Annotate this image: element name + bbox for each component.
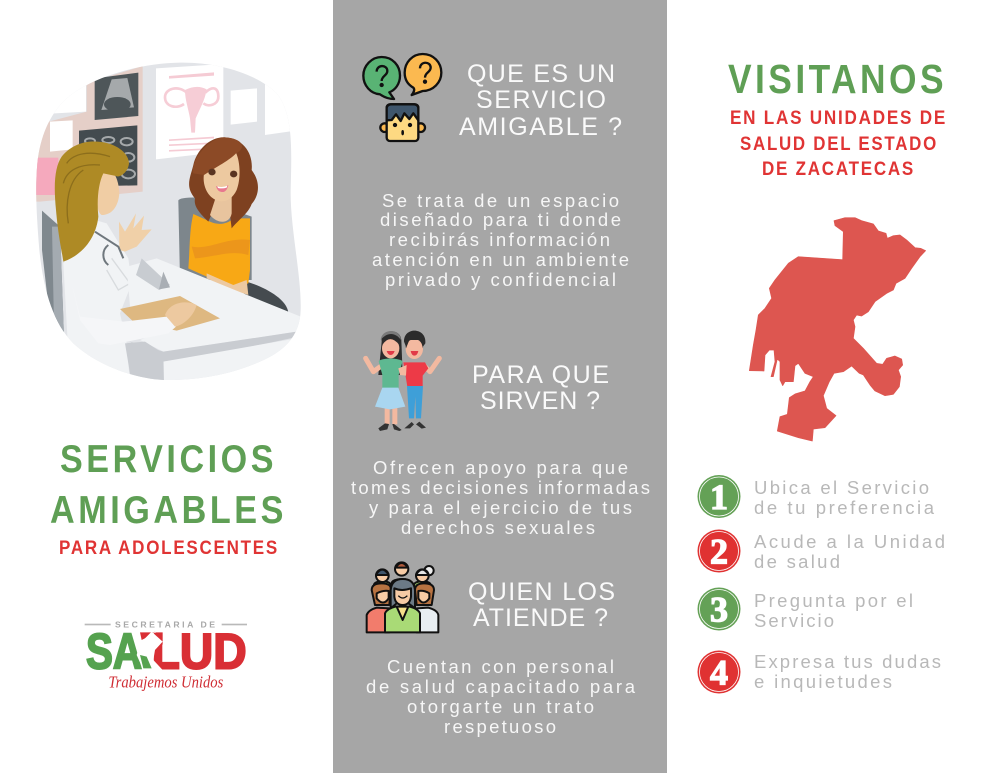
pink sheet [36, 158, 58, 195]
patient sweater [188, 214, 250, 288]
icon: two adolescents [366, 331, 439, 431]
text block: quien los atiende: de salud capacitado para [366, 676, 636, 697]
desk sign [136, 258, 170, 290]
patient hair back [189, 137, 258, 228]
text block: para que sirven: derechos sexuales [401, 517, 595, 538]
text block: definicion: privado y confidencial [385, 269, 616, 290]
step 3: Pregunta por el [754, 590, 913, 611]
illustration: consultation [36, 62, 301, 380]
text block: quien los atiende: respetuoso [444, 716, 556, 737]
step 3 [698, 588, 913, 631]
step 3: 3 [710, 590, 728, 630]
heading: quien los atiende: QUIEN LOS [468, 578, 615, 606]
step 2 [698, 530, 945, 572]
heading: visitanos: VISITANOS [728, 56, 947, 102]
heading: para que sirven: PARA QUE [472, 361, 609, 389]
scan poster [79, 125, 137, 187]
step 4 [698, 650, 941, 694]
heading: servicios amigables: SERVICIOS [60, 438, 277, 481]
text block: para que sirven: Ofrecen apoyo para que [373, 457, 628, 478]
logo: secretaria de salud: SECRETARIA DE [115, 620, 215, 630]
text block: quien los atiende [366, 656, 636, 737]
subheading: unidades de salud: SALUD DEL ESTADO [740, 133, 938, 155]
patient eyes and mouth [208, 169, 216, 175]
heading: para que sirven: SIRVEN ? [480, 387, 600, 415]
subheading: unidades de salud: EN LAS UNIDADES DE [730, 107, 947, 129]
folder [120, 296, 220, 331]
text block: definicion: atención en un ambiente [372, 249, 629, 270]
heading: que es un servicio amigable: SERVICIO [476, 86, 606, 114]
panel: centre column [333, 0, 667, 773]
heading: quien los atiende [468, 578, 615, 632]
logo: secretaria de salud: Trabajemos Unidos [108, 672, 223, 691]
desk [127, 258, 301, 352]
icon: health team [367, 562, 438, 632]
step 4: 4 [710, 652, 728, 692]
logo: secretaria de salud: LUD [152, 624, 247, 680]
patient chair [178, 197, 252, 280]
subheading: unidades de salud: DE ZACATECAS [762, 158, 915, 180]
text block: para que sirven: tomes decisiones informadas [351, 477, 650, 498]
icon: question bubbles and head [363, 54, 441, 141]
text block: quien los atiende: otorgarte un trato [407, 696, 594, 717]
step 4: Expresa tus dudas [754, 651, 941, 672]
step 1 [698, 475, 935, 518]
patient arms [207, 273, 248, 295]
step 4: e inquietudes [754, 671, 892, 692]
heading: servicios amigables: AMIGABLES [50, 489, 287, 532]
text block: definicion: Se trata de un espacio [382, 190, 619, 211]
doctor hair [55, 141, 129, 262]
doctor chair [42, 211, 64, 337]
heading: que es un servicio amigable [459, 60, 622, 141]
doctor hand [119, 213, 152, 252]
beige board [30, 66, 143, 202]
text block: para que sirven [351, 457, 650, 538]
logo: secretaria de salud [85, 620, 247, 691]
text block: quien los atiende: Cuentan con personal [387, 656, 614, 677]
step 1: Ubica el Servicio [754, 477, 929, 498]
doctor face [98, 173, 120, 215]
heading: quien los atiende: ATIENDE ? [473, 604, 608, 632]
heading: servicios amigables [50, 438, 287, 532]
heading: que es un servicio amigable: AMIGABLE ? [459, 113, 622, 141]
text block: definicion [372, 190, 629, 290]
heading: que es un servicio amigable: QUE ES UN [467, 60, 615, 88]
doctor coat [63, 220, 132, 383]
text block: definicion: recibirás información [389, 229, 610, 250]
step 1: de tu preferencia [754, 497, 935, 518]
subheading: unidades de salud [730, 107, 947, 180]
text block: para que sirven: y para el ejercicio de tus [369, 497, 632, 518]
wall [36, 62, 301, 374]
white sheets [54, 86, 86, 114]
logo: secretaria de salud: SA [86, 624, 142, 680]
heading: para que sirven [472, 361, 609, 415]
ultrasound poster [95, 73, 138, 120]
map: zacatecas [749, 218, 926, 441]
step 1: 1 [710, 477, 728, 517]
text block: definicion: diseñado para ti donde [380, 209, 621, 230]
step 2: 2 [710, 532, 728, 572]
uterus poster [156, 64, 223, 159]
doctor sleeve and hand [122, 316, 176, 342]
patient neck and face [210, 197, 232, 222]
step 2: de salud [754, 551, 840, 572]
subheading: para adolescentes: PARA ADOLESCENTES [59, 537, 279, 559]
step 3: Servicio [754, 610, 834, 631]
step 2: Acude a la Unidad [754, 531, 945, 552]
stethoscope [95, 232, 123, 265]
